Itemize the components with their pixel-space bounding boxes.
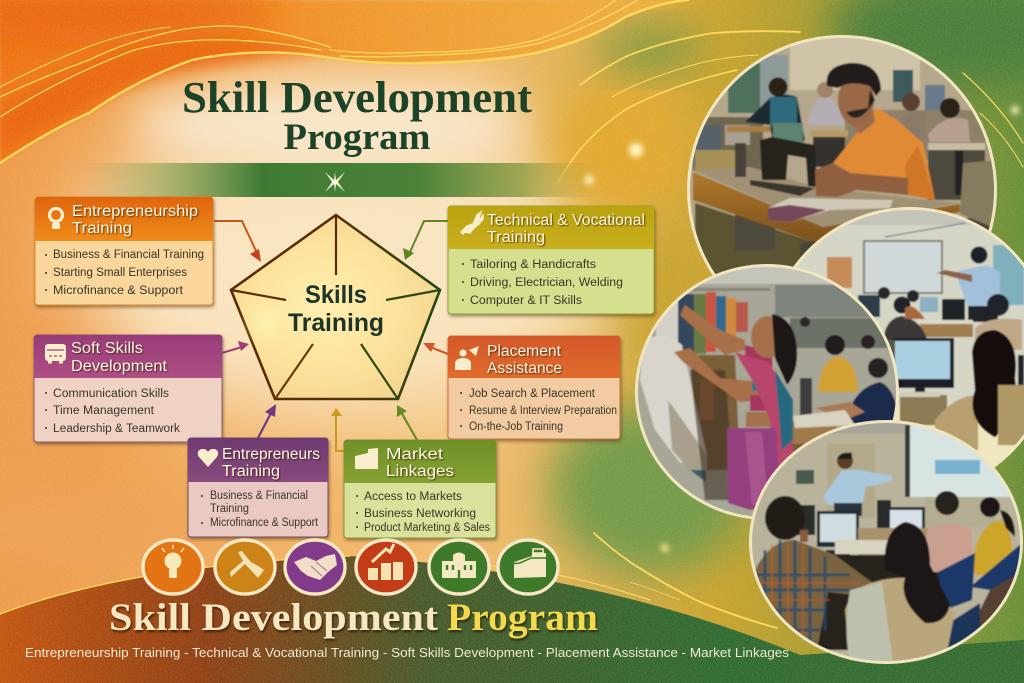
photo: computer classroom xyxy=(793,207,1024,468)
arrow: technical to centre xyxy=(403,221,448,260)
panel: technical and vocational training: Technical & Vocational xyxy=(487,212,645,229)
icon: person with arrow xyxy=(455,346,479,370)
photo: tailoring workshop xyxy=(687,35,997,276)
plaid student xyxy=(755,540,873,650)
footer title xyxy=(109,596,598,639)
sewing machine xyxy=(760,137,817,187)
photo: garment training xyxy=(635,262,900,522)
panel: technical and vocational training: Computer & IT Skills xyxy=(470,295,582,307)
fabric xyxy=(768,198,893,222)
icon: folder xyxy=(355,448,378,469)
panel: soft skills development: Development xyxy=(71,358,168,375)
panel: technical and vocational training: Driving, Electrician, Welding xyxy=(470,277,623,289)
panel: placement assistance: Resume & Interview Preparation xyxy=(469,405,617,417)
arrow: placement to centre xyxy=(423,343,448,354)
icon: tools badge xyxy=(215,540,275,594)
icon: calendar board xyxy=(45,344,66,364)
desks and monitors xyxy=(795,505,815,535)
footer title: Skill Development xyxy=(109,596,438,639)
panel: entrepreneurs training xyxy=(188,438,328,537)
panel: entrepreneurs training: Training xyxy=(222,463,280,480)
icon row xyxy=(143,540,558,594)
crowd xyxy=(790,318,900,348)
panel: entrepreneurs training: Business & Financial xyxy=(210,490,308,502)
photo: computer lab lecture xyxy=(745,418,1024,668)
panel: technical and vocational training: Training xyxy=(487,229,545,246)
teacher xyxy=(955,265,1000,307)
right students xyxy=(925,524,972,572)
teacher xyxy=(823,470,892,505)
panel: market linkages: Access to Markets xyxy=(364,491,462,503)
woman in front xyxy=(845,578,955,662)
garments xyxy=(655,301,679,342)
man xyxy=(833,108,935,200)
arrow: entrepreneurs to centre xyxy=(258,404,276,438)
icon: wrench xyxy=(461,212,483,234)
panel: placement assistance: On-the-Job Training xyxy=(469,421,563,433)
icon: bulb xyxy=(50,208,62,229)
icon: briefcase badge xyxy=(498,540,558,594)
table and underside xyxy=(694,202,812,274)
orange sky above the main swoosh xyxy=(0,0,688,163)
panel: entrepreneurship training: Entrepreneurship xyxy=(72,203,198,220)
arrow: soft skills to centre xyxy=(222,341,249,353)
icon: light bulb badge xyxy=(143,540,203,594)
title: Skill Development xyxy=(182,73,532,122)
arrow: market linkages to centre xyxy=(397,405,417,440)
icon: growth chart badge xyxy=(356,540,416,594)
ribbon band with star xyxy=(80,163,600,197)
arrow: entrepreneurship to centre xyxy=(214,221,261,262)
desks and monitors xyxy=(858,295,880,317)
panel: entrepreneurship training: Business & Financial Training xyxy=(53,249,204,261)
panel: placement assistance: Job Search & Placement xyxy=(469,388,596,400)
panel: technical and vocational training xyxy=(448,206,654,314)
panel: soft skills development: Soft Skills xyxy=(71,340,143,357)
panel: technical and vocational training: Tailoring & Handicrafts xyxy=(470,259,596,271)
bottom dark swell xyxy=(0,556,1024,683)
panel: entrepreneurship training xyxy=(35,197,213,305)
panel: entrepreneurs training: Training xyxy=(210,503,249,515)
panel: entrepreneurs training: Microfinance & Support xyxy=(210,517,319,529)
central pentagon: skills training: Skills xyxy=(305,281,367,309)
footer subtitle: Entrepreneurship Training - Technical & Vocational Training - Soft Skills Development - Placement Assistance - Market Linkages xyxy=(25,645,790,660)
panel: market linkages xyxy=(344,440,496,538)
panel: entrepreneurs training: Entrepreneurs xyxy=(222,446,320,463)
panel: market linkages: Product Marketing & Sales xyxy=(364,522,490,534)
panel: market linkages: Linkages xyxy=(386,463,454,480)
panel: entrepreneurship training: Starting Small Enterprises xyxy=(53,267,187,279)
white clothes xyxy=(640,336,707,463)
panel: soft skills development: Time Management xyxy=(53,405,155,417)
central pentagon: skills training: Training xyxy=(288,309,384,337)
panel: placement assistance: Placement xyxy=(487,343,562,360)
icon: institute building badge xyxy=(429,540,489,594)
footer title: Program xyxy=(447,596,598,639)
panel: soft skills development: Leadership & Teamwork xyxy=(53,423,180,435)
panel: placement assistance: Assistance xyxy=(487,360,562,377)
panel: market linkages: Market xyxy=(386,446,444,463)
panel: soft skills development: Communication Skills xyxy=(53,388,169,400)
arrow: gold up to centre xyxy=(331,408,345,451)
seated xyxy=(894,296,910,314)
people behind xyxy=(745,95,805,145)
panel: placement assistance xyxy=(448,336,620,439)
panel: market linkages: Business Networking xyxy=(364,508,476,520)
icon: handshake badge xyxy=(285,540,345,594)
woman xyxy=(690,370,735,500)
panel: entrepreneurship training: Microfinance & Support xyxy=(53,285,184,297)
icon: heart xyxy=(198,449,218,467)
title: Program xyxy=(284,117,431,158)
central pentagon: skills training xyxy=(231,215,440,399)
title xyxy=(182,73,532,158)
panel: entrepreneurship training: Training xyxy=(72,220,132,237)
panel: soft skills development xyxy=(34,335,222,442)
